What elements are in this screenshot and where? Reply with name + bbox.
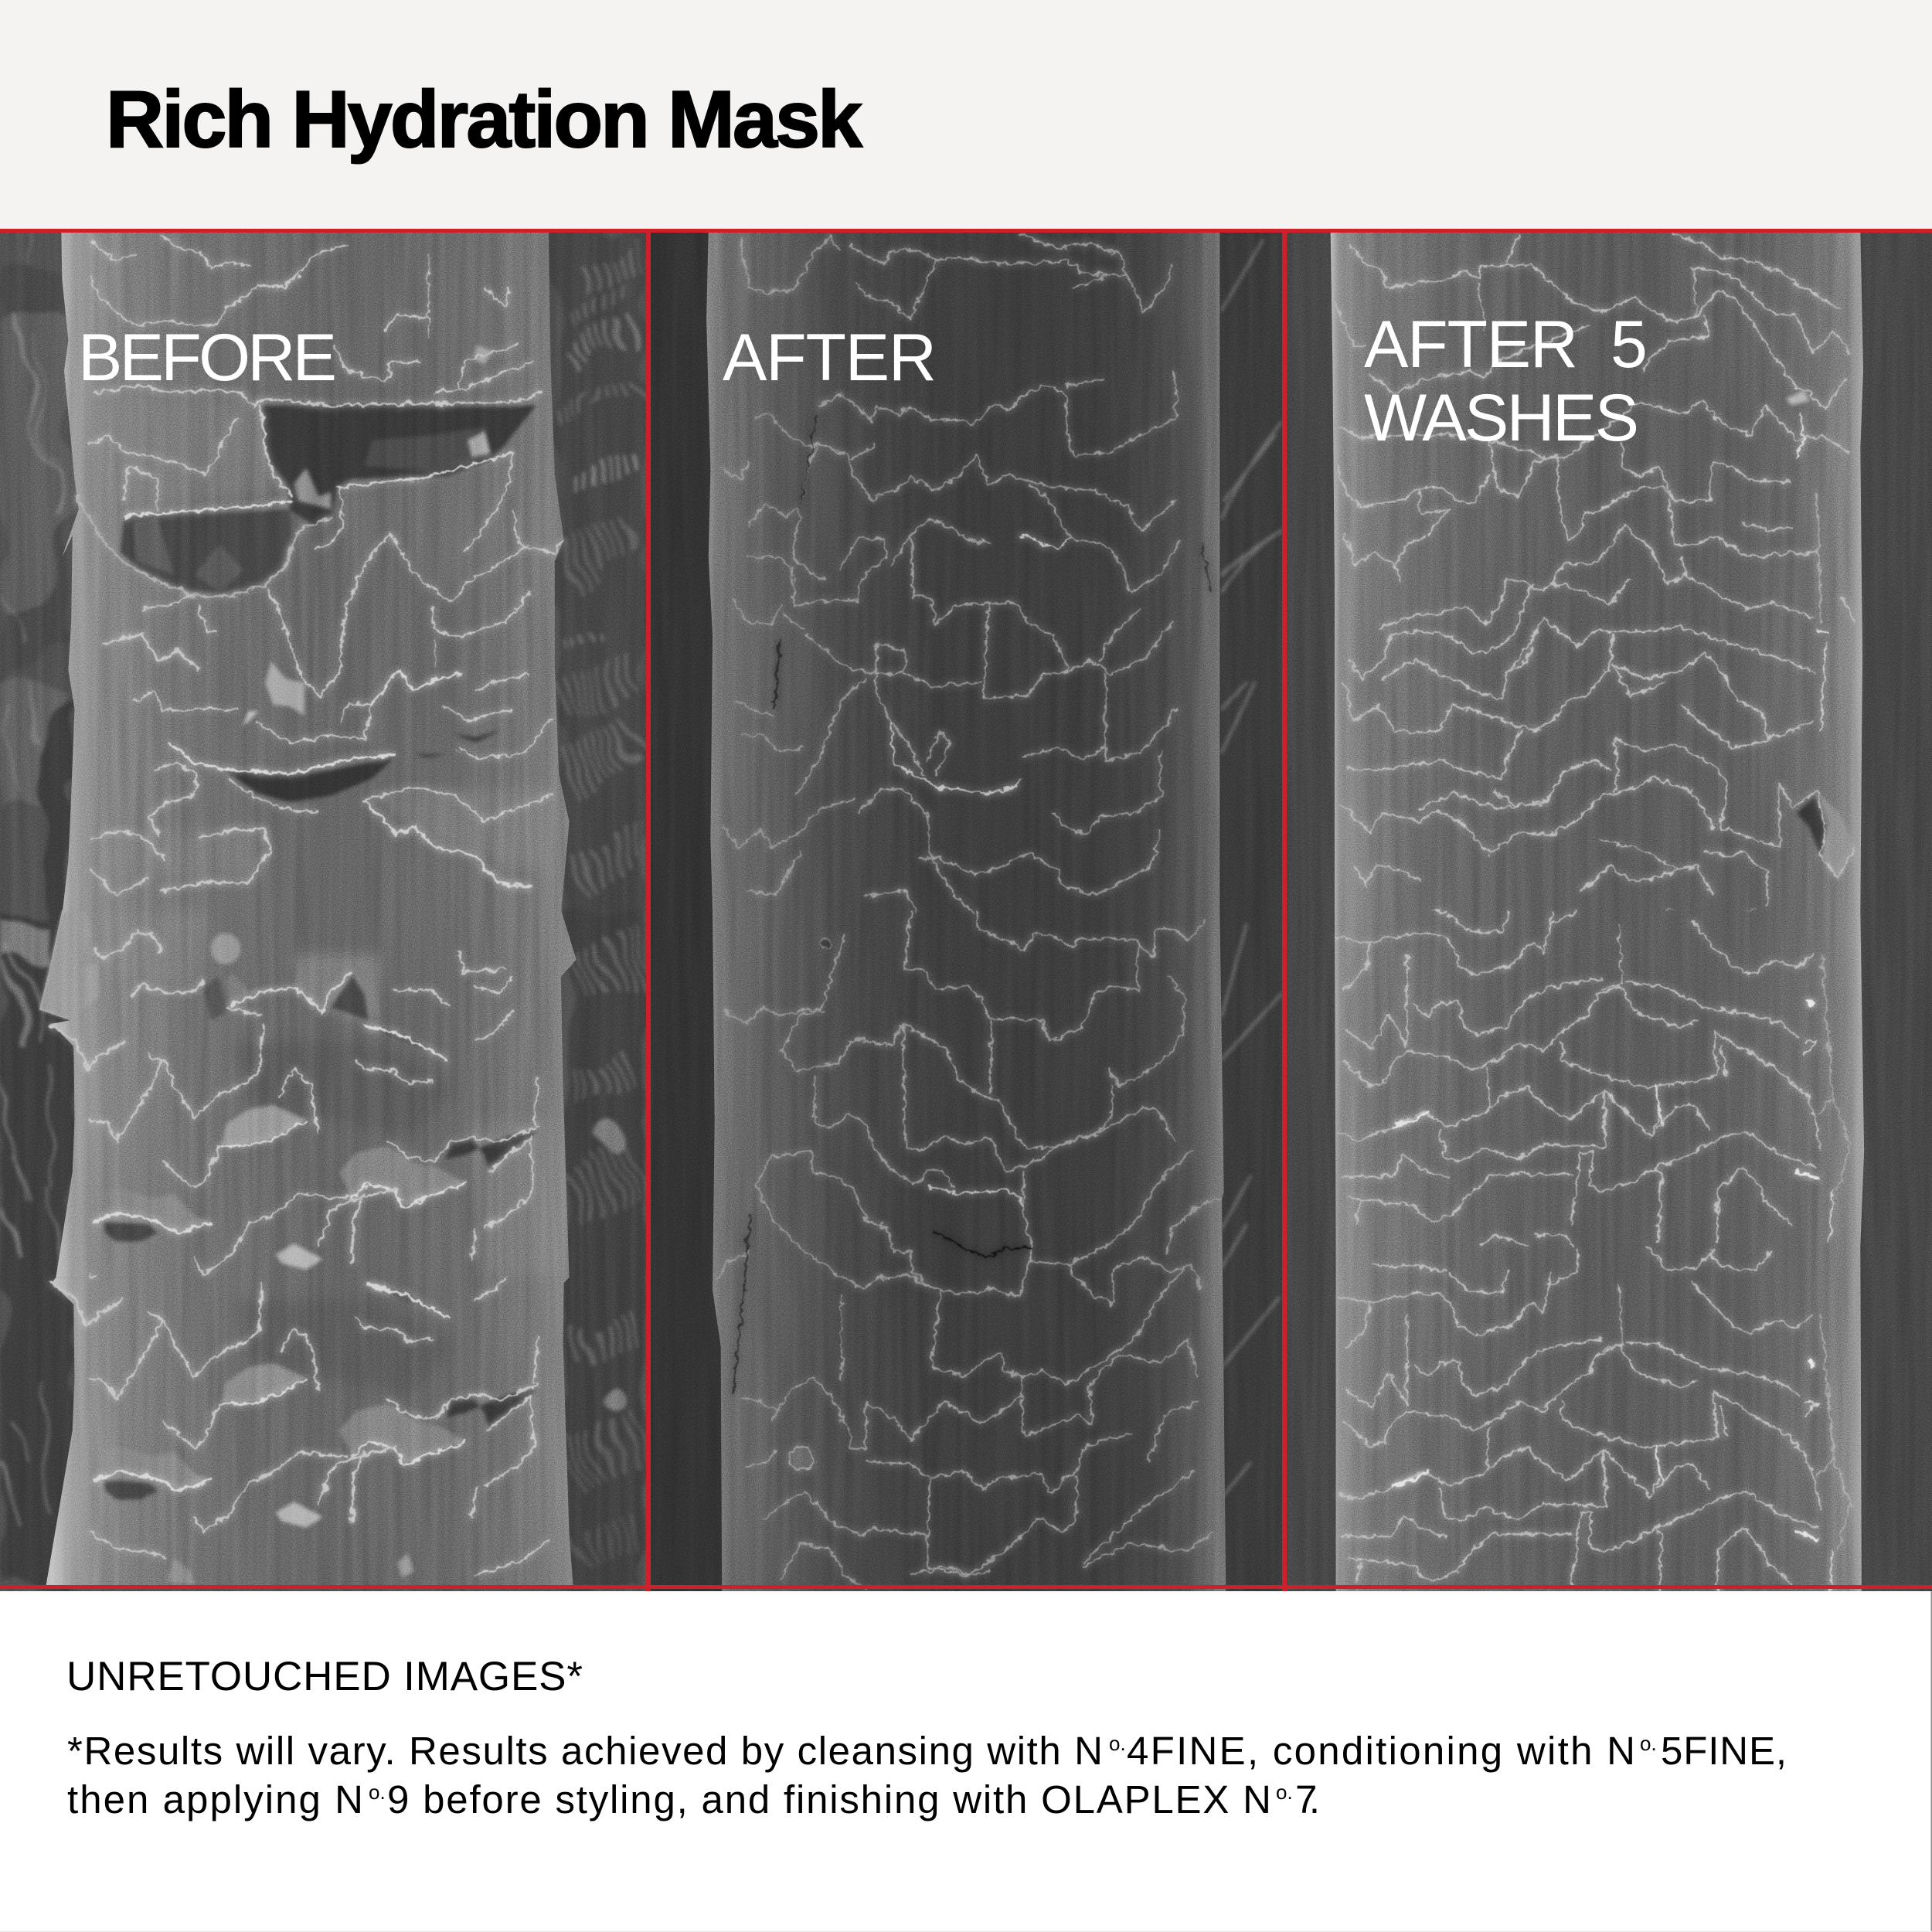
label: after 5 washes: WASHES <box>1364 381 1639 455</box>
page edge lines <box>0 1591 1932 1932</box>
cuticle scale edges: after <box>716 234 1219 1588</box>
header band <box>0 0 1932 229</box>
footer background <box>0 1591 1932 1932</box>
cuticle scale edges: before <box>49 234 563 1576</box>
soft lighter scale shading: before <box>145 399 543 1393</box>
label: after 5 washes: 5 <box>1611 308 1648 382</box>
hair fibre: after <box>706 230 1226 1594</box>
label: after 5 washes: AFTER <box>1364 308 1578 382</box>
panel: after <box>651 230 1289 1594</box>
footnote text: o. <box>1109 1732 1126 1755</box>
footnote text: then applying N <box>67 1777 363 1821</box>
subheading: unretouched images: UNRETOUCHED IMAGES* <box>66 1654 583 1699</box>
red frame lines <box>0 229 1932 1591</box>
background fibres: after <box>1219 232 1289 1594</box>
label: after 5 washes <box>1364 308 1648 455</box>
footnote text: 9 before styling, and finishing with OLAPLEX N <box>387 1777 1271 1821</box>
vertical striation overlay <box>0 233 1932 1591</box>
footnote text: o. <box>369 1781 386 1804</box>
footnote text: o. <box>1640 1732 1657 1755</box>
footnote text: 7. <box>1295 1777 1320 1821</box>
title: Rich Hydration Mask <box>106 75 862 165</box>
label: after: AFTER <box>723 321 937 395</box>
panel: after 5 washes <box>1287 230 1932 1606</box>
cuticle scale edges: after 5 washes <box>1337 234 1854 1606</box>
footnote text: *Results will vary. Results achieved by cleansing with N <box>67 1729 1103 1773</box>
footnote text: o. <box>1276 1781 1293 1804</box>
film grain overlay <box>0 233 1932 1591</box>
tears in the cuticle: before <box>39 345 538 1584</box>
background fibres: before <box>0 232 646 1592</box>
label: before: BEFORE <box>78 321 337 395</box>
footnote text <box>67 1729 1787 1821</box>
footnote text: 5FINE, <box>1661 1729 1787 1773</box>
footnote text: 4FINE, conditioning with N <box>1127 1729 1635 1773</box>
hair fibre: after 5 washes <box>1331 230 1864 1594</box>
hair fibre: before <box>39 230 577 1588</box>
highlights and flap tear: after 5 washes <box>1786 390 1856 880</box>
panel: before <box>0 230 646 1592</box>
